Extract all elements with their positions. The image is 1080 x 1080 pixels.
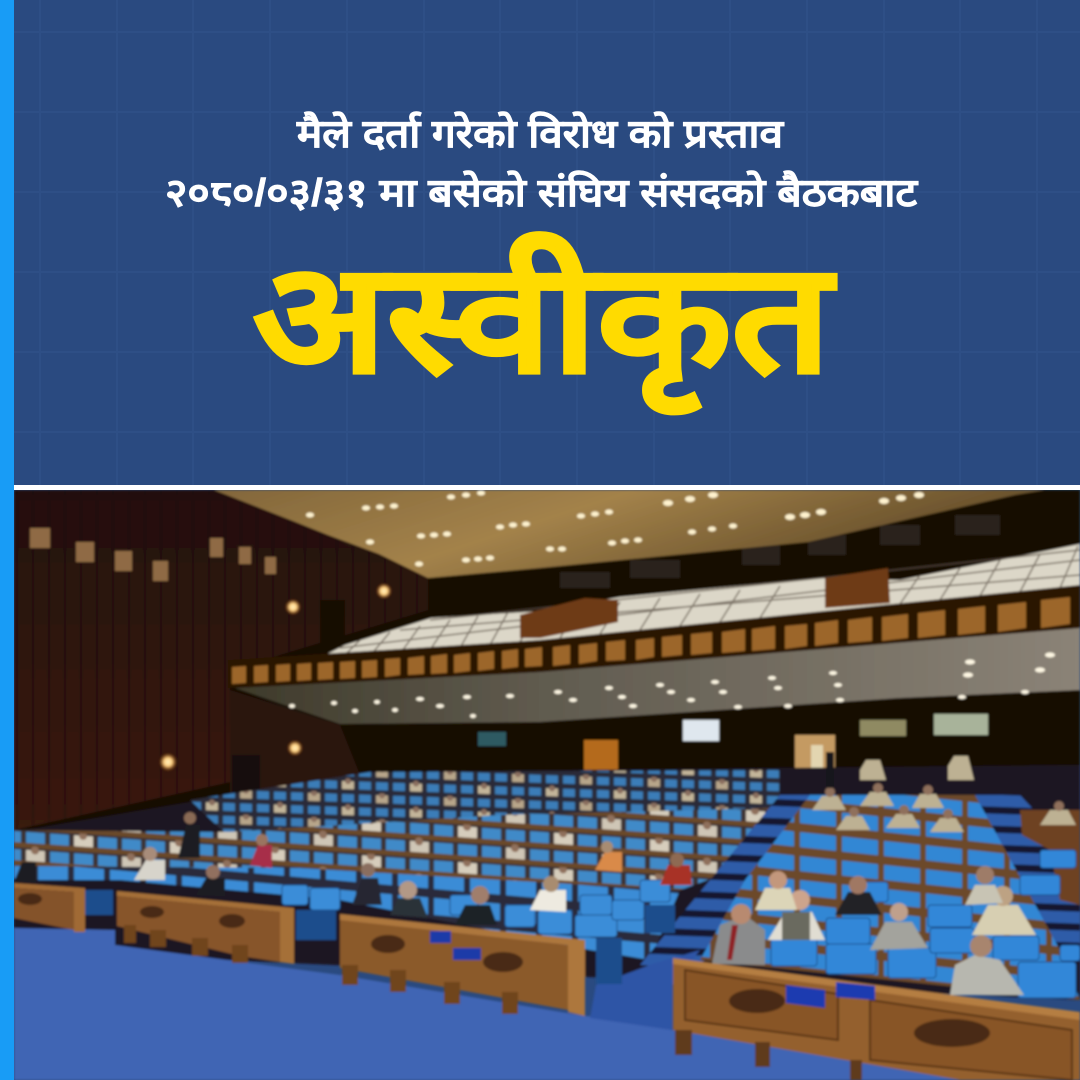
seated members left — [14, 812, 692, 925]
ceiling — [145, 490, 1045, 578]
back wall panels — [560, 515, 1000, 588]
front right seats — [771, 850, 1080, 998]
wall panels — [30, 528, 276, 581]
divider — [14, 485, 1080, 490]
main title: अस्वीकृत — [253, 232, 837, 415]
stepped floor base — [14, 765, 1080, 1000]
stairs right — [975, 795, 1080, 960]
balcony white seats — [315, 544, 1080, 662]
seats front left — [14, 866, 680, 960]
standing figure — [826, 752, 834, 788]
balcony panels — [232, 597, 1070, 684]
seated members right — [712, 866, 1036, 995]
carpet — [14, 928, 1000, 1080]
name plates — [786, 985, 825, 1008]
left block foreground seats — [282, 880, 670, 937]
balcony front band — [228, 585, 1080, 688]
doors — [232, 600, 835, 800]
wall — [14, 490, 1080, 832]
screens — [478, 714, 988, 746]
heading line 1: मैले दर्ता गरेको विरोध को प्रस्ताव — [296, 111, 784, 156]
accent bar — [0, 0, 14, 1080]
ceiling lights — [306, 490, 924, 566]
right seating block — [700, 795, 1080, 1000]
stairs — [640, 795, 815, 968]
underside lights — [289, 652, 1055, 718]
desk far left — [14, 883, 85, 932]
wall lamps — [159, 583, 392, 771]
right edge desks — [1020, 810, 1080, 905]
right top audience — [812, 756, 1076, 832]
desk front — [673, 958, 1080, 1080]
desk centre left — [117, 891, 294, 964]
people — [14, 752, 1036, 995]
heading — [165, 111, 918, 215]
photo: parliament chamber — [14, 490, 1080, 1080]
heading line 2: २०८०/०३/३१ मा बसेको संघिय संसदको बैठकबाट — [165, 170, 918, 215]
seats back — [190, 770, 780, 838]
balcony underside — [235, 628, 1080, 724]
seats middle — [14, 806, 770, 892]
chair sides — [85, 890, 675, 984]
desk centre right — [340, 914, 585, 1016]
name plates — [430, 931, 451, 943]
